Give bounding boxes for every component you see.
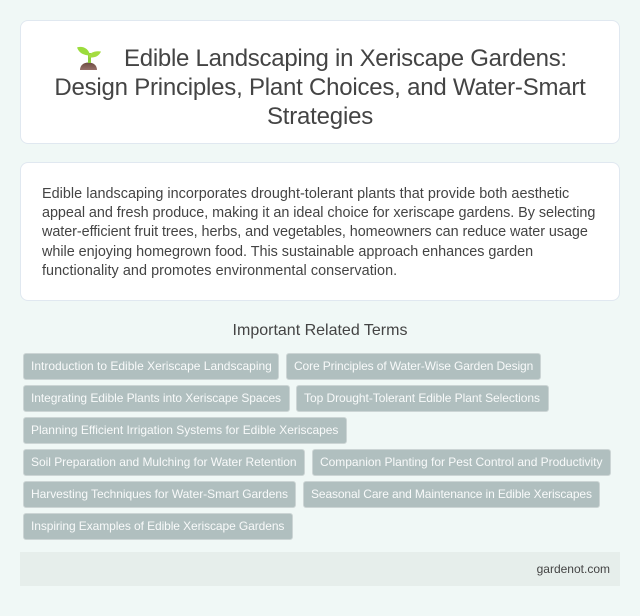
tag: Inspiring Examples of Edible Xeriscape Gardens [31, 519, 284, 533]
tag: Companion Planting for Pest Control and Productivity [320, 455, 602, 469]
tag [303, 481, 600, 508]
header panel [20, 20, 620, 144]
tag [23, 481, 296, 508]
intro paragraph: while enjoying homegrown food. This sustainable approach enhances garden [42, 244, 533, 260]
footer source text: gardenot.com [537, 562, 610, 576]
footer bar [20, 552, 620, 586]
intro paragraph [42, 186, 595, 279]
tag: Harvesting Techniques for Water-Smart Gardens [31, 487, 288, 501]
tag: Soil Preparation and Mulching for Water Retention [31, 455, 297, 469]
tag: Seasonal Care and Maintenance in Edible Xeriscapes [311, 487, 592, 501]
tag [23, 513, 293, 540]
related terms heading: Important Related Terms [233, 322, 407, 339]
title: Design Principles, Plant Choices, and Water-Smart [54, 74, 586, 101]
tag [296, 385, 549, 412]
tag [312, 449, 611, 476]
related terms tag list [23, 353, 611, 540]
title: Strategies [267, 103, 373, 130]
tag: Top Drought-Tolerant Edible Plant Selections [304, 391, 540, 405]
tag [23, 449, 305, 476]
tag: Core Principles of Water-Wise Garden Design [294, 359, 533, 373]
tag: Introduction to Edible Xeriscape Landscaping [31, 359, 272, 373]
tag [286, 353, 541, 380]
tag [23, 385, 290, 412]
intro paragraph: functionality and promotes environmental conservation. [42, 263, 397, 279]
intro paragraph: Edible landscaping incorporates drought-tolerant plants that provide both aesthetic [42, 186, 569, 202]
intro paragraph: water-efficient fruit trees, herbs, and vegetables, homeowners can reduce water usage [42, 224, 588, 240]
icon: seedling [77, 46, 101, 70]
title: Edible Landscaping in Xeriscape Gardens: [124, 45, 567, 72]
tag: Integrating Edible Plants into Xeriscape Spaces [31, 391, 281, 405]
intro text panel [20, 162, 620, 301]
tag: Planning Efficient Irrigation Systems for Edible Xeriscapes [31, 423, 338, 437]
intro paragraph: appeal and fresh produce, making it an ideal choice for xeriscape gardens. By selecting [42, 205, 595, 221]
tag [23, 353, 279, 380]
title [54, 45, 586, 130]
tag [23, 417, 347, 444]
